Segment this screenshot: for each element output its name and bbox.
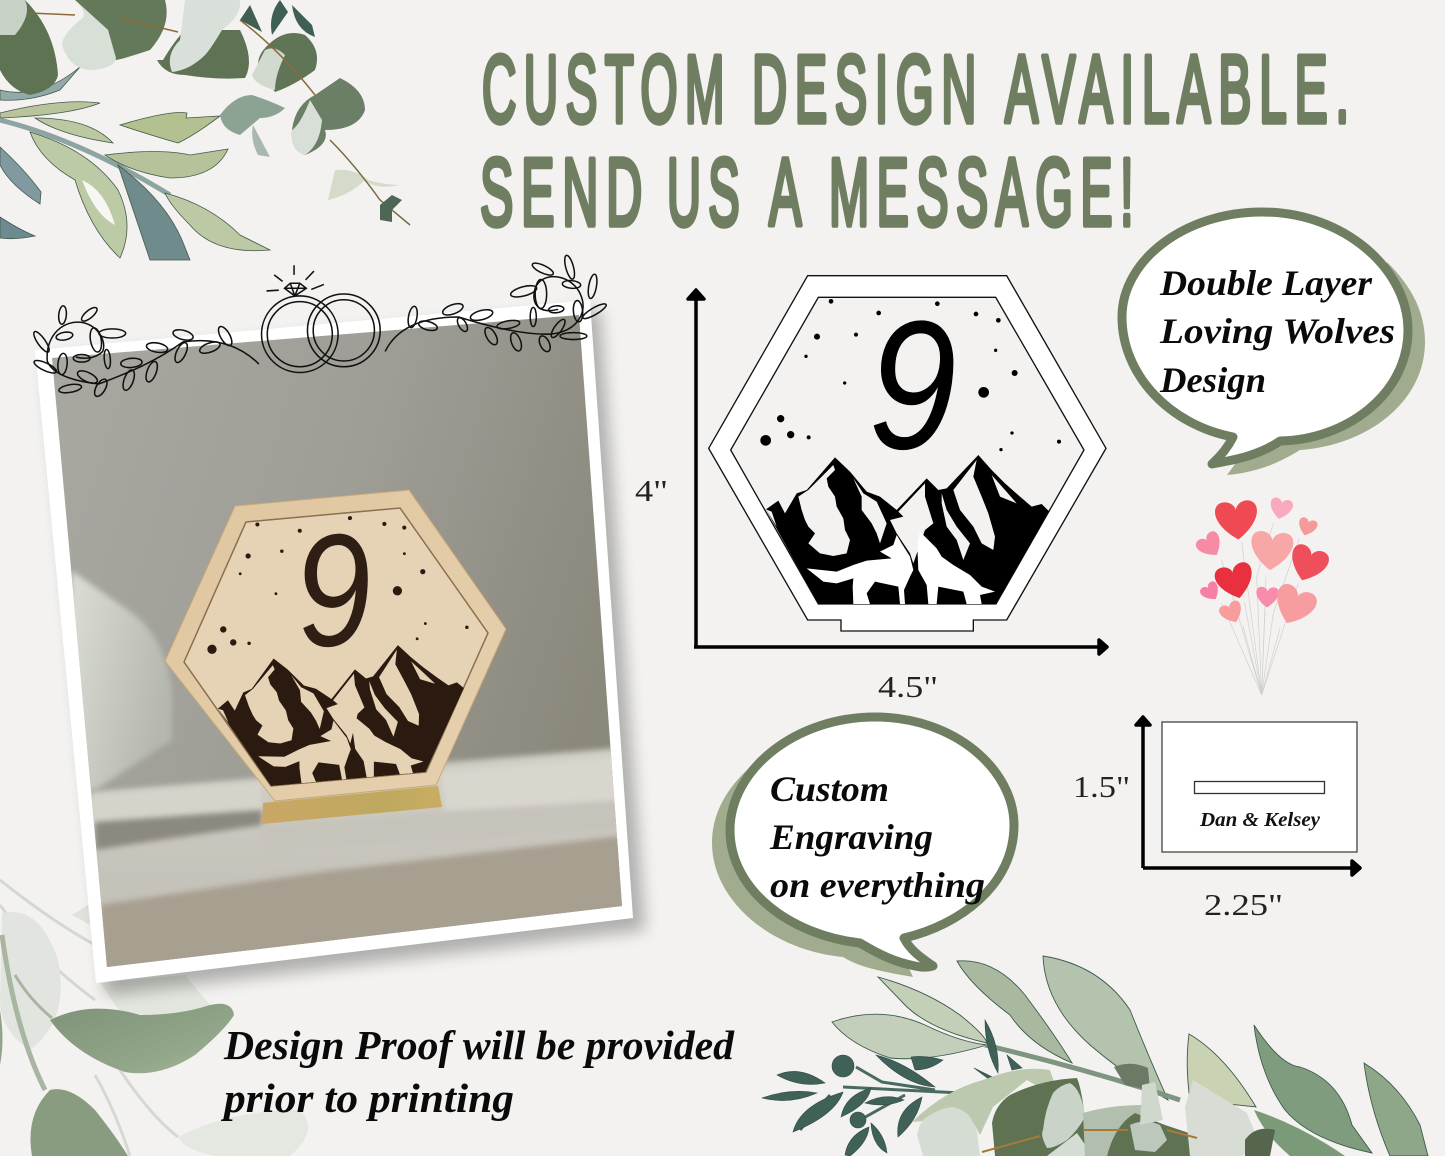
bubble text: Custom [770, 769, 889, 809]
axes [1136, 717, 1360, 875]
title: CUSTOM [482, 36, 732, 143]
foliage: top left [0, 0, 410, 260]
card slot [1194, 782, 1324, 794]
photo: wooden base [262, 786, 442, 824]
photo: engraved number: 9 [287, 498, 380, 682]
mountains and wolves artwork [760, 299, 1061, 604]
bubble text [1159, 263, 1395, 400]
foliage: bottom left [0, 880, 308, 1156]
bubble text [769, 769, 985, 905]
title: A [769, 139, 809, 246]
icon: wedding rings [262, 265, 380, 372]
name card dimension diagram [1073, 717, 1360, 922]
design proof note: Design Proof will be provided [223, 1022, 734, 1068]
icon: heart balloons [1194, 497, 1331, 695]
bubble text: Double Layer [1159, 263, 1373, 303]
bubble text: on everything [770, 865, 985, 905]
design proof note: prior to printing [221, 1075, 514, 1121]
axis: height arrow [688, 290, 704, 647]
hexagon dimension diagram [635, 276, 1107, 704]
label: width: 4.5" [878, 669, 938, 704]
bubble text: Loving Wolves [1159, 311, 1395, 351]
title: SEND [480, 139, 650, 246]
title [480, 36, 1357, 246]
speech bubble: custom engraving [712, 717, 1014, 977]
label: width: 2.25" [1204, 887, 1283, 922]
engraved names: Dan & Kelsey [1199, 809, 1320, 831]
card [1162, 722, 1357, 852]
label: height: 4" [635, 473, 668, 508]
speech bubble: double layer [1122, 212, 1425, 475]
title: MESSAGE! [829, 139, 1141, 246]
label: height: 1.5" [1073, 769, 1130, 804]
bubble text: Design [1159, 360, 1266, 400]
hexagon outline [709, 276, 1106, 631]
title: DESIGN [752, 36, 984, 143]
foliage: bottom right [762, 956, 1428, 1156]
table number: 9 [868, 282, 957, 487]
ring and vine line art [31, 254, 608, 398]
vine: left [31, 305, 259, 398]
bubble text: Engraving [769, 817, 933, 857]
photo: wooden hexagon sign [165, 490, 506, 801]
panel: framed product photo [35, 300, 645, 995]
vine: right [385, 254, 608, 353]
axis: width arrow [694, 640, 1107, 654]
title: US [667, 139, 747, 246]
design proof note [221, 1022, 734, 1121]
